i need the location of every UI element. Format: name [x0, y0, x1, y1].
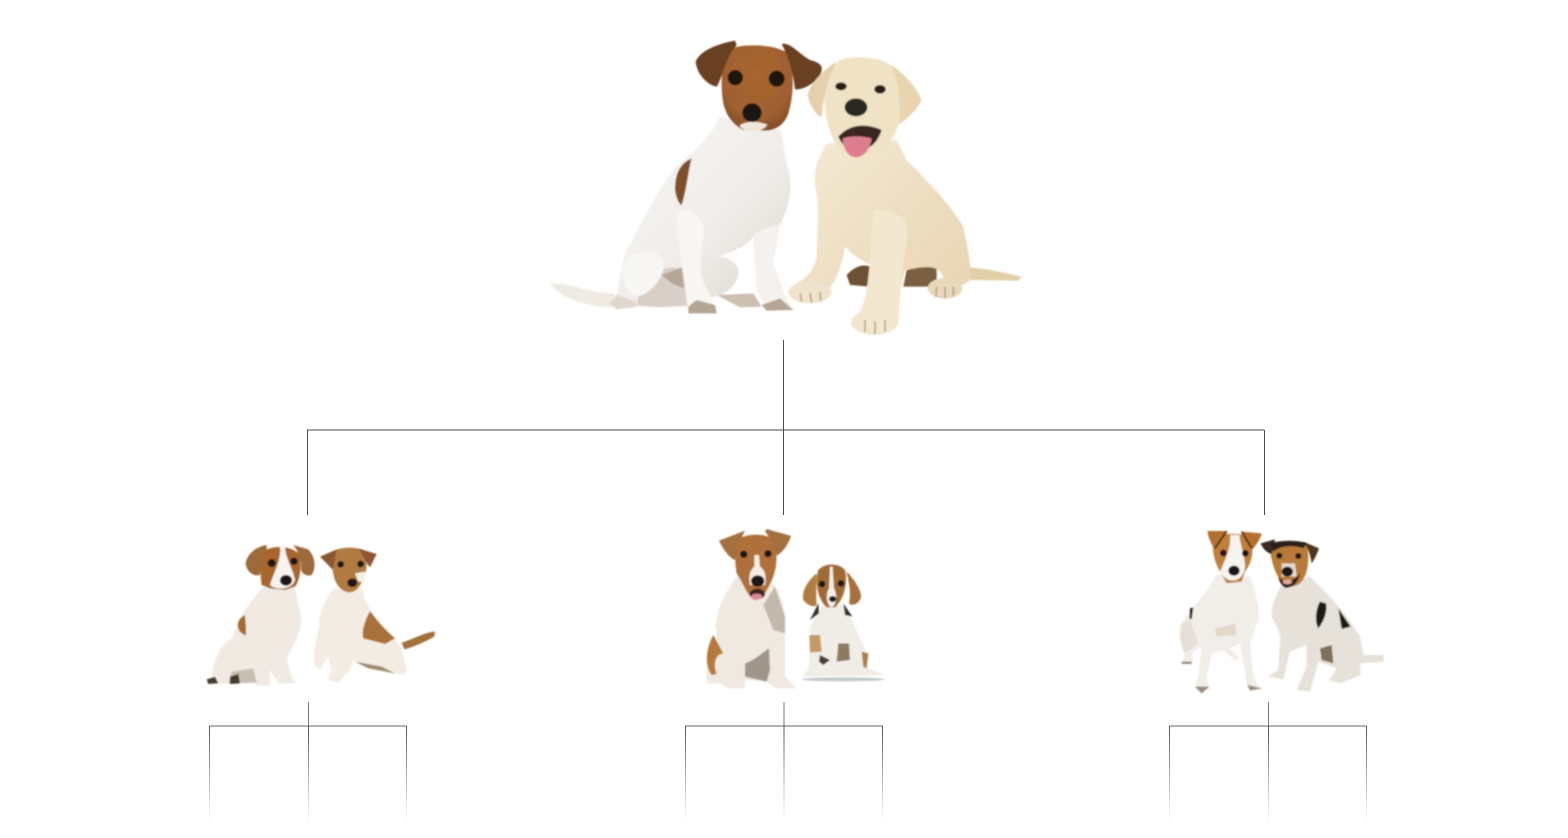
- icon: tricolour terrier: [1261, 539, 1383, 692]
- icon: rough-coated terrier: [314, 548, 435, 683]
- icon: white and tan terrier: [1180, 531, 1262, 693]
- litter: left pair: [207, 545, 435, 685]
- litter: middle pair: [706, 529, 885, 688]
- icon: beagle puppy: [802, 564, 885, 681]
- icon: jack russell with floppy ears: [207, 545, 315, 685]
- icon: jack russell open mouth: [706, 529, 797, 688]
- connector: right branch: [1169, 702, 1367, 823]
- connector: middle branch: [685, 702, 883, 823]
- parent dogs: [550, 41, 1022, 335]
- icon: jack russell parent: [550, 41, 822, 313]
- litter: right pair: [1180, 531, 1383, 693]
- icon: yellow labrador parent: [788, 57, 1022, 335]
- connector: parents to three litters: [307, 340, 1265, 515]
- connector: left branch: [209, 702, 407, 823]
